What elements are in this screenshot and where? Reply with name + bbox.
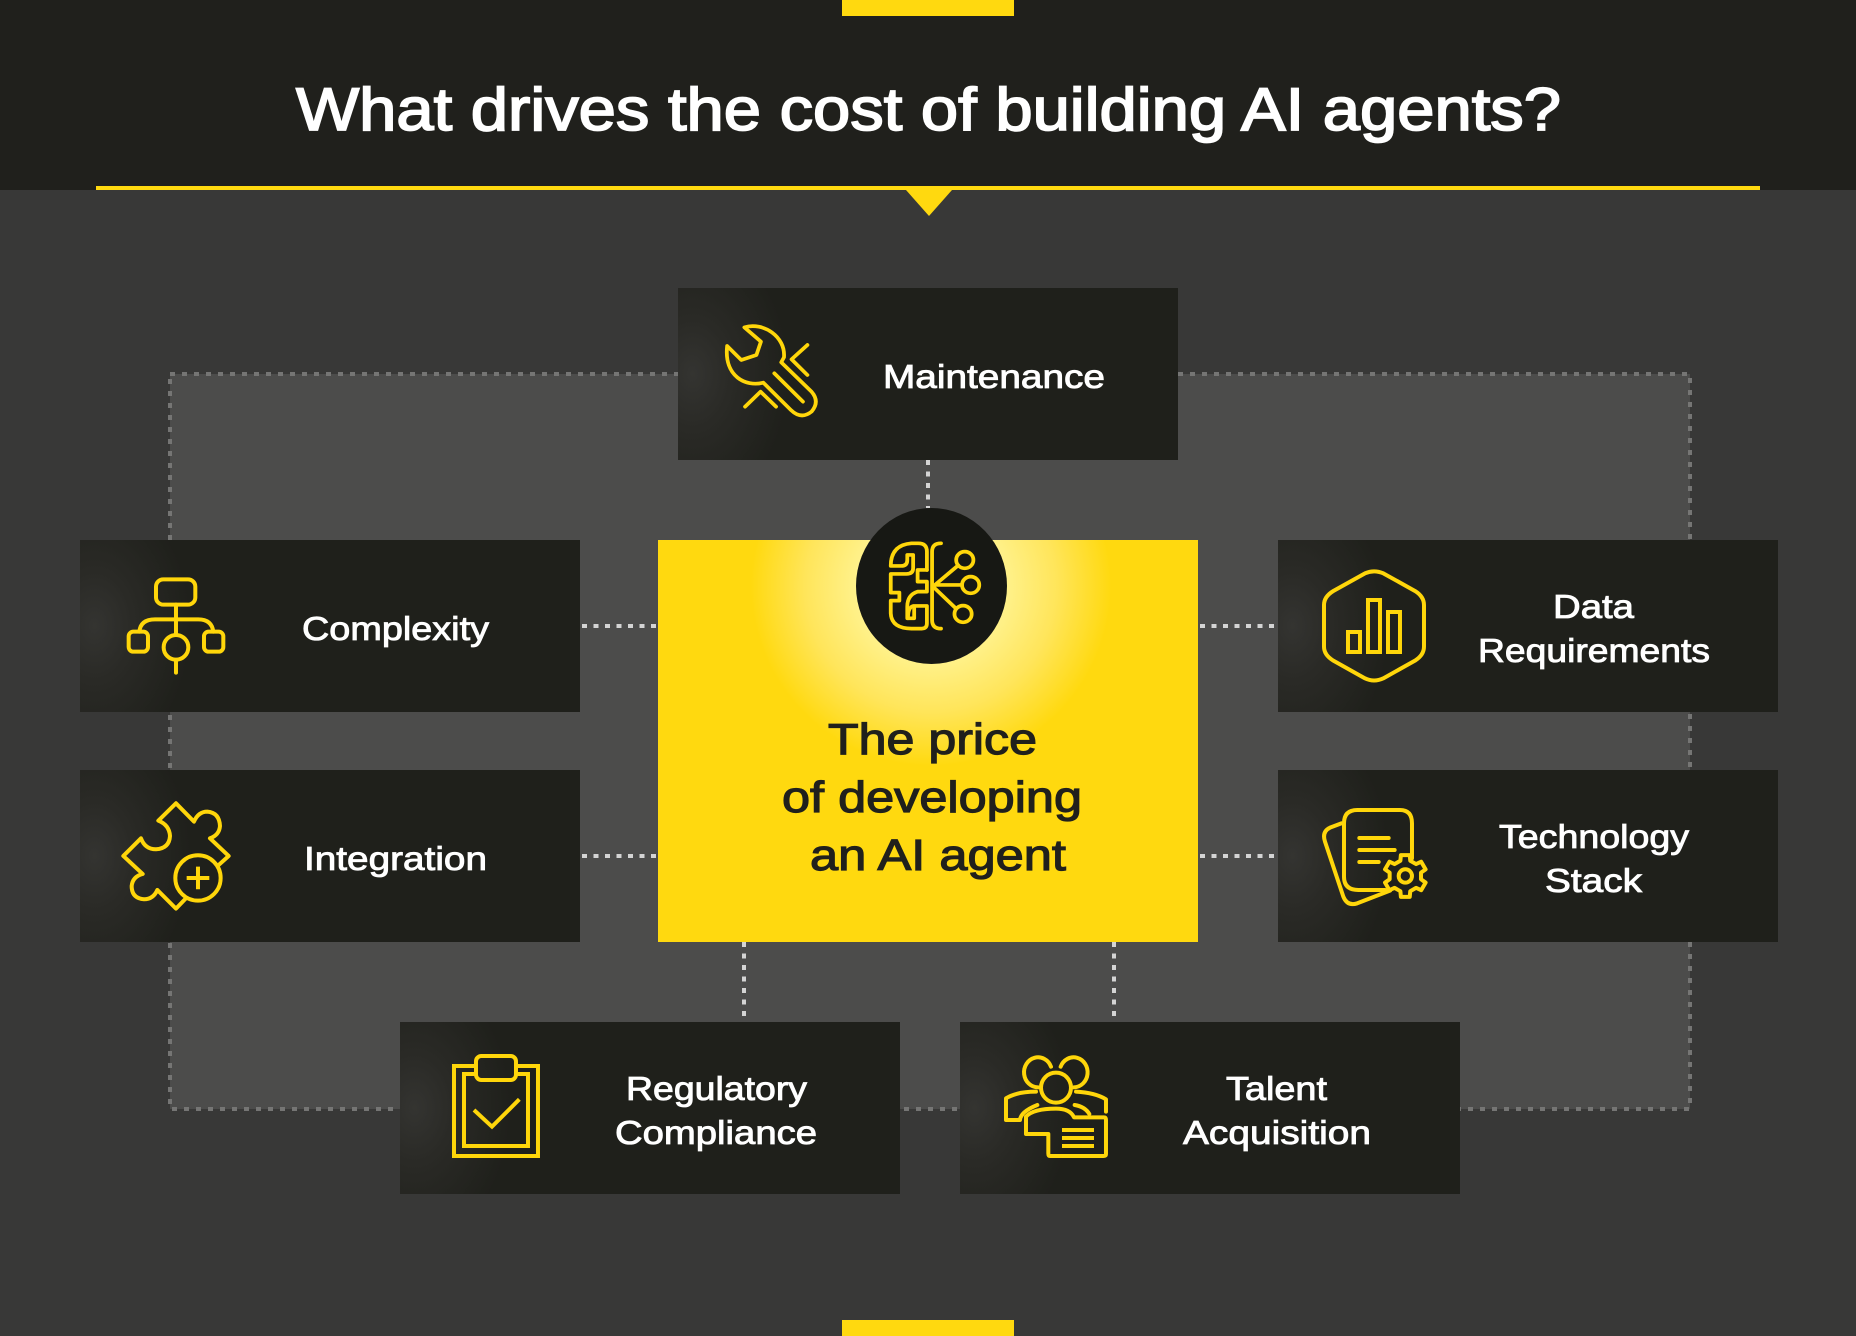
- label: Requirements: [1478, 632, 1710, 669]
- icon: AI brain in dark circle: [856, 508, 1007, 664]
- label: Stack: [1545, 862, 1643, 899]
- label: Complexity: [302, 610, 490, 647]
- label: [1499, 818, 1690, 899]
- panel: Maintenance: [678, 288, 1178, 460]
- panel: Data Requirements: [1278, 540, 1778, 712]
- label: [1183, 1070, 1371, 1151]
- label: Maintenance: [883, 358, 1105, 395]
- label: Regulatory: [626, 1070, 808, 1107]
- label: Integration: [304, 840, 487, 877]
- center panel: the price of developing an AI agent: [658, 540, 1198, 942]
- panel: Integration: [80, 770, 580, 942]
- center text: [782, 715, 1082, 880]
- header band: [0, 0, 1856, 190]
- icon: clipboard with check: [454, 1056, 538, 1156]
- center text: of developing: [782, 773, 1082, 822]
- panel: Complexity: [80, 540, 580, 712]
- label: Data: [1553, 588, 1635, 625]
- label: Talent: [1226, 1070, 1327, 1107]
- icon: flowchart: [129, 579, 223, 673]
- title: What drives the cost of building AI agents?: [296, 76, 1561, 143]
- label: Acquisition: [1183, 1114, 1371, 1151]
- panel: Talent Acquisition: [960, 1022, 1460, 1194]
- icon: wrench: [727, 326, 816, 415]
- bottom accent bar: [842, 1320, 1014, 1336]
- label: [1478, 588, 1710, 669]
- label: [615, 1070, 817, 1151]
- label: Compliance: [615, 1114, 817, 1151]
- header underline with pointer: [96, 186, 1760, 216]
- center text: The price: [828, 715, 1037, 764]
- icon: hexagon bar chart: [1324, 571, 1424, 680]
- label: Technology: [1499, 818, 1690, 855]
- icon: puzzle piece with plus: [123, 803, 229, 909]
- dashed inner panel: [170, 374, 1690, 1109]
- radial glow: [658, 540, 1198, 942]
- center text: an AI agent: [810, 831, 1066, 880]
- panel: Technology Stack: [1278, 770, 1778, 942]
- icon: documents with gear: [1324, 810, 1426, 904]
- connector lines: [582, 460, 1278, 1022]
- icon: people with resume: [1006, 1057, 1106, 1156]
- panel: Regulatory Compliance: [400, 1022, 900, 1194]
